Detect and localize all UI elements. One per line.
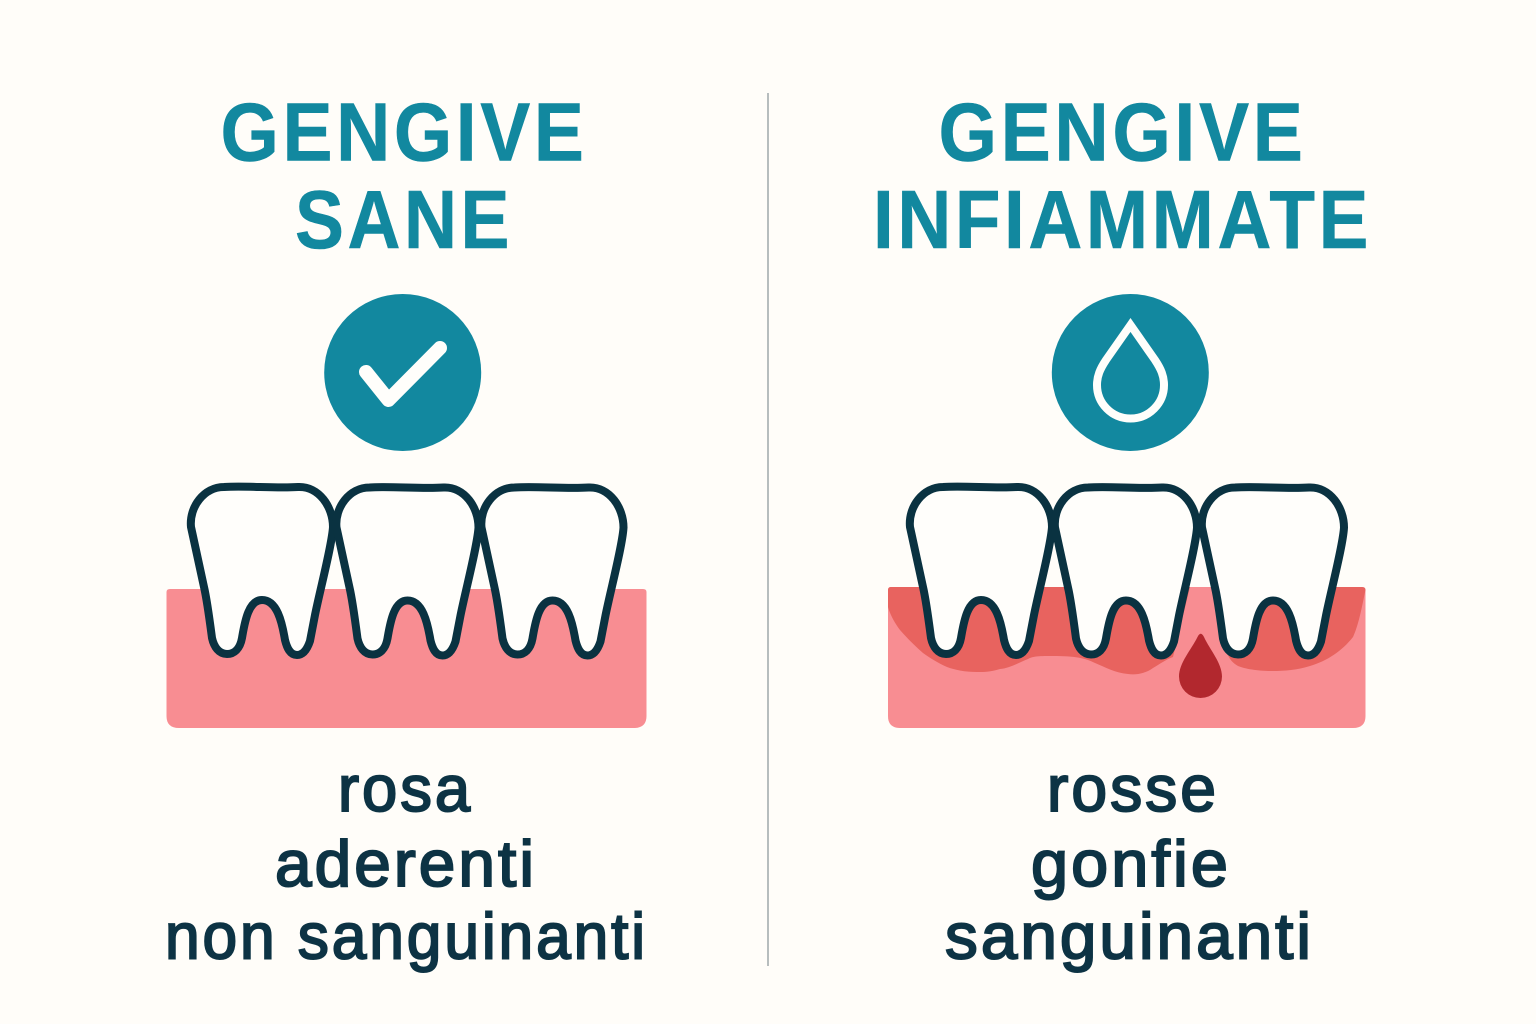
text: healthy gum traits: rosa: [338, 752, 473, 825]
heading: gengive infiammate: [873, 86, 1372, 266]
text: inflamed gum traits: [945, 752, 1314, 972]
text: inflamed gum traits: rosse: [1047, 752, 1219, 825]
heading: gengive infiammate: INFIAMMATE: [873, 173, 1372, 266]
panel: inflamed gums: [873, 86, 1372, 972]
icon: water drop badge: [1052, 294, 1209, 451]
panel: healthy gums: [165, 86, 648, 972]
icon: blood drop: [1179, 634, 1222, 698]
heading: gengive sane: GENGIVE: [220, 86, 588, 178]
heading: gengive sane: [220, 86, 588, 266]
heading: gengive sane: SANE: [295, 173, 513, 266]
text: inflamed gum traits: sanguinanti: [945, 900, 1314, 972]
inflamed gum area: [888, 587, 1190, 674]
text: healthy gum traits: aderenti: [275, 827, 537, 900]
icon: check mark badge: [324, 294, 481, 451]
illustration: teeth in inflamed gum: [888, 487, 1366, 728]
heading: gengive infiammate: GENGIVE: [938, 86, 1306, 178]
text: healthy gum traits: [165, 752, 648, 972]
text: healthy gum traits: non sanguinanti: [165, 900, 648, 972]
text: inflamed gum traits: gonfie: [1031, 827, 1231, 900]
illustration: teeth in healthy gum: [166, 487, 646, 728]
